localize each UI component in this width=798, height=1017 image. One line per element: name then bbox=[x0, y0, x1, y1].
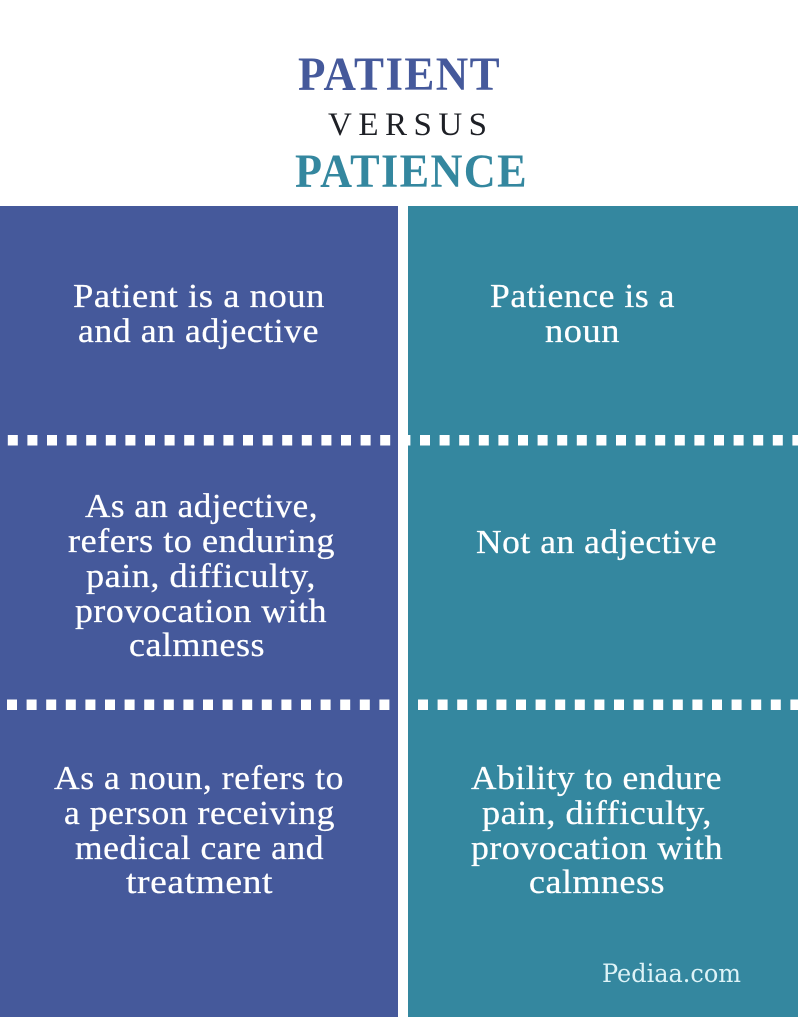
text: patient as adjective bbox=[68, 488, 335, 664]
title: VERSUS bbox=[328, 107, 487, 143]
text: patience word class: Patience is a bbox=[490, 278, 675, 315]
divider: row 2 dotted bbox=[7, 699, 798, 710]
text: patience definition: calmness bbox=[529, 864, 665, 901]
text: patient as noun: a person receiving bbox=[64, 795, 335, 832]
title: PATIENT bbox=[298, 48, 501, 101]
text: patience word class: noun bbox=[545, 313, 620, 350]
text: patience definition: provocation with bbox=[471, 830, 723, 867]
text: patient word class: Patient is a noun bbox=[73, 278, 325, 315]
text: patient as noun: As a noun, refers to bbox=[54, 760, 344, 797]
text: patient as noun: medical care and bbox=[75, 830, 324, 867]
text: patient as adjective: calmness bbox=[129, 627, 265, 664]
text: patient as adjective: provocation with bbox=[75, 593, 327, 630]
text: patient as noun bbox=[54, 760, 344, 901]
text: patient as adjective: pain, difficulty, bbox=[86, 558, 316, 595]
text: patience definition: Ability to endure bbox=[471, 760, 722, 797]
text: patient word class bbox=[73, 278, 325, 350]
text: patience definition: pain, difficulty, bbox=[482, 795, 712, 832]
title: PATIENCE bbox=[295, 145, 528, 198]
panel: patient column bbox=[0, 206, 398, 1017]
text: patience not adjective: Not an adjective bbox=[476, 524, 717, 561]
title bbox=[295, 48, 528, 198]
panel: patience column bbox=[408, 206, 798, 1017]
text: patience word class bbox=[490, 278, 675, 350]
text: patient as noun: treatment bbox=[126, 864, 273, 901]
text: patient as adjective: As an adjective, bbox=[85, 488, 318, 525]
divider: row 1 dotted bbox=[8, 435, 798, 446]
logo: Pediaa.com: Pediaa.com bbox=[602, 959, 741, 988]
text: patient word class: and an adjective bbox=[78, 313, 319, 350]
text: patient as adjective: refers to enduring bbox=[68, 523, 335, 560]
text: patience definition bbox=[471, 760, 723, 901]
